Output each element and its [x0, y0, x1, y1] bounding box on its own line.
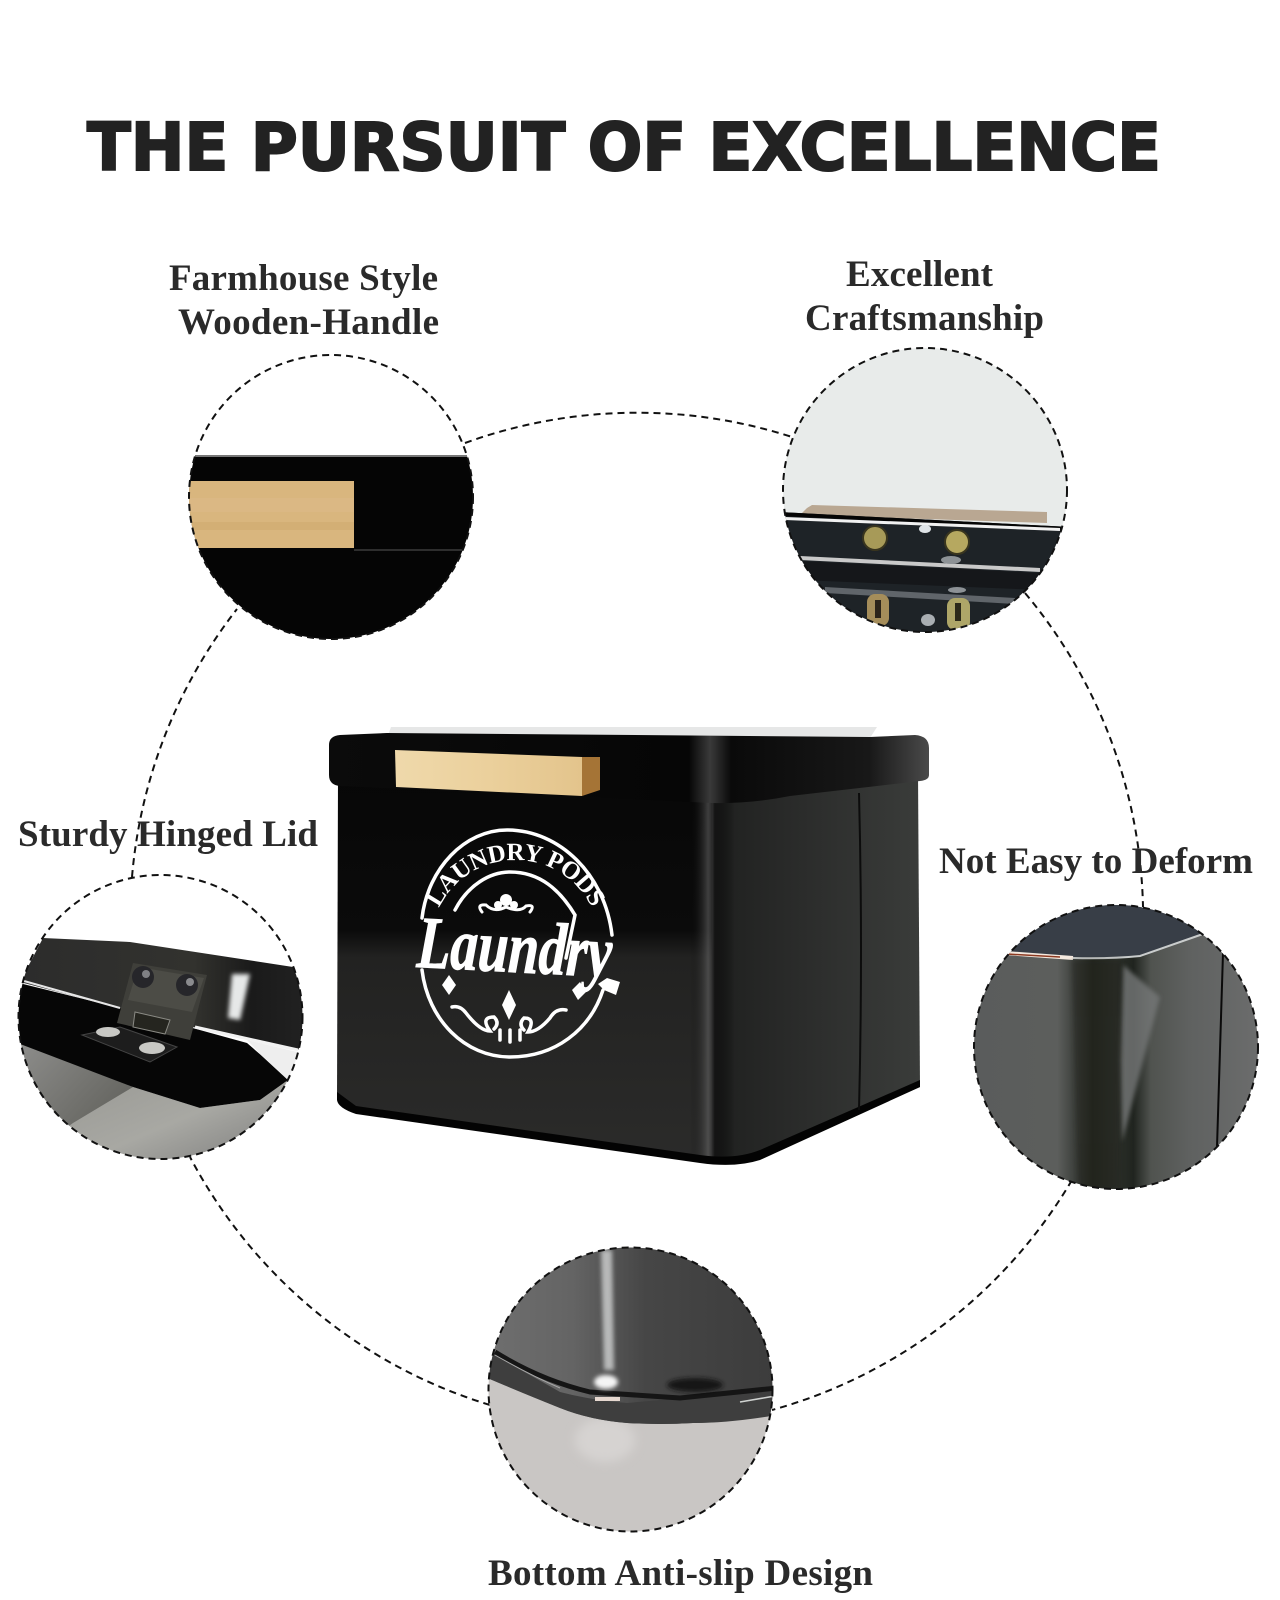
- lid: [329, 733, 929, 803]
- tin body side: [712, 772, 920, 1163]
- dashed ring connecting detail circles: [132, 413, 1143, 1410]
- body corner highlight: [690, 800, 735, 1160]
- tin body front: [337, 775, 716, 1163]
- label: farmhouse style wooden-handle: [169, 258, 439, 343]
- lid top plate: [387, 727, 877, 738]
- detail circle: bottom anti-slip: [485, 1245, 777, 1537]
- detail circle: hinged lid: [15, 870, 310, 1165]
- label: bottom anti-slip design: Bottom Anti-slip Design: [488, 1553, 873, 1594]
- label: not easy to deform: Not Easy to Deform: [939, 841, 1253, 882]
- detail circle: wooden handle: [188, 354, 474, 640]
- label: farmhouse style wooden-handle: Farmhouse Style: [169, 258, 438, 299]
- label: excellent craftsmanship: [805, 254, 1044, 339]
- label: excellent craftsmanship: Craftsmanship: [805, 298, 1044, 339]
- side seam: [859, 793, 861, 1110]
- title: THE PURSUIT OF EXCELLENCE: [87, 109, 1161, 186]
- label: sturdy hinged lid: Sturdy Hinged Lid: [18, 814, 318, 855]
- logo: [415, 828, 620, 1059]
- bottom rim: [337, 1080, 920, 1165]
- detail circle: screws craftsmanship: [780, 345, 1070, 640]
- logo: LAUNDRY PODS: [428, 844, 605, 908]
- product: black laundry tin: [329, 727, 929, 1165]
- label: excellent craftsmanship: Excellent: [846, 254, 994, 295]
- label: farmhouse style wooden-handle: Wooden-Handle: [178, 302, 439, 343]
- logo: Laundry: [415, 902, 615, 994]
- detail circle: corner not easy to deform: [970, 900, 1262, 1192]
- wooden handle: [395, 750, 600, 796]
